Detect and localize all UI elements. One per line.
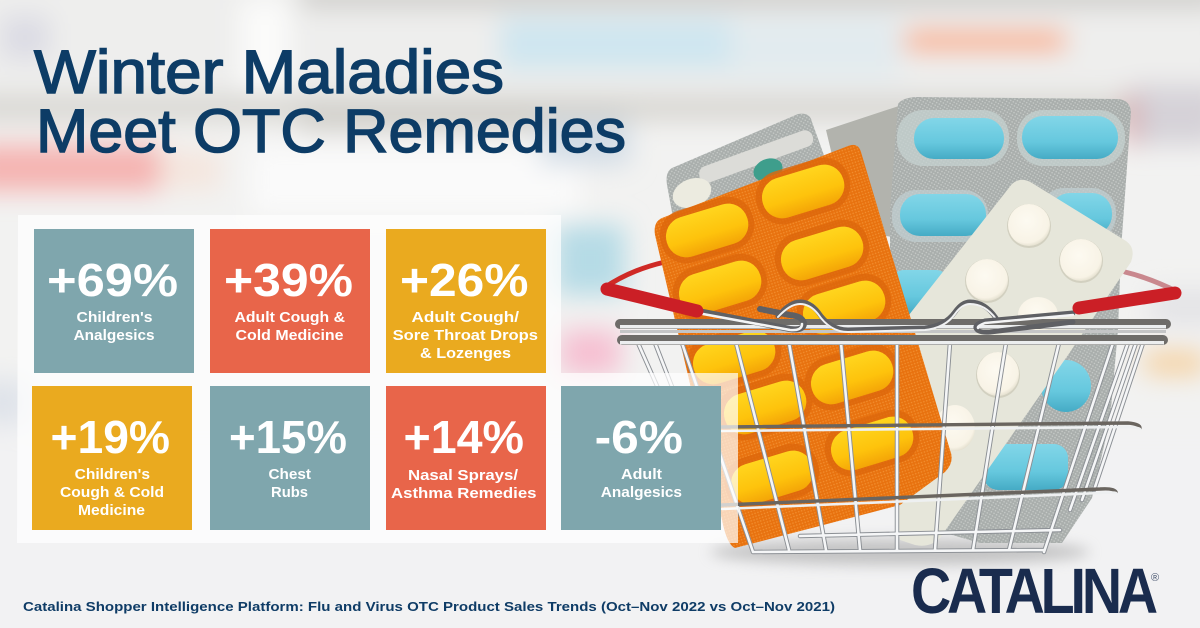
tile: Adult Cough & Cold Medicine +39%: Cold Medicine bbox=[236, 328, 344, 344]
tile: Chest Rubs +15%: Chest bbox=[268, 467, 311, 483]
tile: Children's Analgesics +69%: +69% bbox=[47, 254, 178, 306]
grey blister pack, back left bbox=[667, 114, 892, 320]
footer source line: Catalina Shopper Intelligence Platform: Flu and Virus OTC Product Sales Trends (Oct–Nov 2022 vs Oct–Nov 2021) bbox=[23, 599, 835, 614]
tile: Adult Analgesics -6%: -6% bbox=[595, 411, 683, 463]
tile: Children's Analgesics +69%: Analgesics bbox=[74, 328, 155, 344]
tile: Adult Analgesics -6% bbox=[561, 386, 721, 530]
orange capsule blister pack bbox=[653, 145, 952, 548]
tile: Chest Rubs +15%: Rubs bbox=[271, 485, 308, 501]
tile: Children's Analgesics +69% bbox=[34, 229, 194, 373]
middle hooks bbox=[703, 302, 1073, 332]
basket wire frame bbox=[607, 289, 1175, 552]
horizontal rings bbox=[722, 423, 1140, 509]
rim bbox=[615, 319, 1171, 345]
tile: Children's Analgesics +69%: Children's bbox=[76, 310, 152, 326]
basket shadow bbox=[710, 539, 1090, 565]
tile: Adult Cough & Cold Medicine +39%: Adult Cough & bbox=[234, 310, 346, 326]
tile: Chest Rubs +15% bbox=[210, 386, 370, 530]
tile: Chest Rubs +15%: +15% bbox=[229, 411, 347, 463]
title bbox=[34, 38, 626, 165]
red handle grips bbox=[607, 289, 1175, 311]
photo: shopping basket with blister packs bbox=[604, 97, 1178, 565]
tile: Adult Cough/Sore Throat Drops & Lozenges +26%: Sore Throat Drops bbox=[393, 328, 538, 344]
tile: Adult Cough/Sore Throat Drops & Lozenges +26%: +26% bbox=[400, 254, 528, 306]
title: Winter Maladies bbox=[34, 38, 504, 106]
tile: Adult Cough/Sore Throat Drops & Lozenges +26%: & Lozenges bbox=[420, 346, 511, 362]
tile: Adult Cough & Cold Medicine +39% bbox=[210, 229, 370, 373]
translucent white panel behind tiles bbox=[17, 215, 738, 543]
tile: Nasal Sprays/Asthma Remedies +14%: +14% bbox=[404, 411, 524, 463]
tile: Adult Analgesics -6%: Adult bbox=[621, 467, 662, 483]
logo: Catalina: ® bbox=[1151, 572, 1159, 584]
blue capsule blister pack bbox=[890, 97, 1131, 543]
side and bottom wires bbox=[638, 343, 1143, 552]
tile: Children's Cough & Cold Medicine +19%: Medicine bbox=[78, 503, 145, 519]
tile: Adult Analgesics -6%: Analgesics bbox=[601, 485, 682, 501]
tile: Children's Cough & Cold Medicine +19% bbox=[32, 386, 192, 530]
grey blister pack, middle bbox=[826, 104, 910, 240]
tile: Adult Cough/Sore Throat Drops & Lozenges +26% bbox=[386, 229, 546, 373]
tile: Nasal Sprays/Asthma Remedies +14%: Nasal Sprays/ bbox=[408, 468, 518, 484]
tile: Nasal Sprays/Asthma Remedies +14%: Asthma Remedies bbox=[391, 486, 536, 502]
tile: Children's Cough & Cold Medicine +19%: +19% bbox=[50, 411, 170, 463]
tile: Children's Cough & Cold Medicine +19%: Children's bbox=[75, 467, 150, 483]
title: Meet OTC Remedies bbox=[36, 97, 626, 165]
tile: Adult Cough & Cold Medicine +39%: +39% bbox=[224, 254, 353, 306]
tile: Nasal Sprays/Asthma Remedies +14% bbox=[386, 386, 546, 530]
white tablet blister pack bbox=[890, 180, 1133, 546]
back handles bbox=[604, 262, 1178, 292]
tile: Children's Cough & Cold Medicine +19%: Cough & Cold bbox=[60, 485, 164, 501]
tile: Adult Cough/Sore Throat Drops & Lozenges +26%: Adult Cough/ bbox=[412, 310, 519, 326]
logo: Catalina: CATALINA bbox=[911, 555, 1158, 627]
